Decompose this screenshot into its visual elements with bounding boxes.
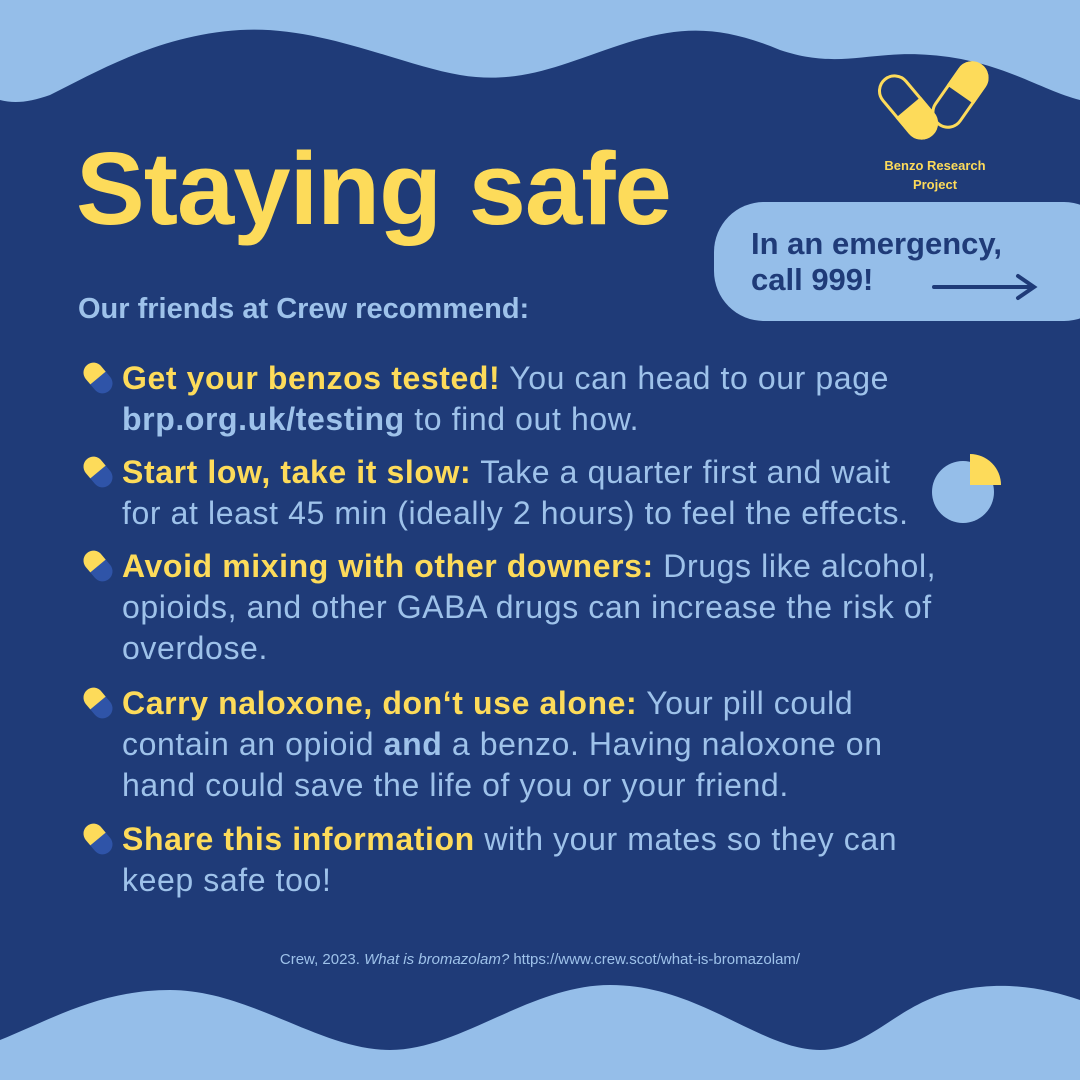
bullet 3: opioids, and other GABA drugs can increase the risk of xyxy=(122,589,932,625)
bullet 5: Share this information with your mates so they can xyxy=(122,821,897,857)
bullet 3 xyxy=(84,548,936,666)
bullet 3: overdose. xyxy=(122,630,268,666)
bullet 3: Avoid mixing with other downers: Drugs like alcohol, xyxy=(122,548,936,584)
bullet list xyxy=(84,360,936,898)
bullet 1: brp.org.uk/testing to find out how. xyxy=(122,401,639,437)
bullet 4 xyxy=(84,685,883,803)
bullet 2 xyxy=(84,454,909,531)
bullet 4: hand could save the life of you or your friend. xyxy=(122,767,789,803)
bullet 4: contain an opioid and a benzo. Having naloxone on xyxy=(122,726,883,762)
bullet 1: Get your benzos tested! You can head to our page xyxy=(122,360,889,396)
arrow xyxy=(932,274,1038,300)
bullet 2: for at least 45 min (ideally 2 hours) to feel the effects. xyxy=(122,495,909,531)
title: Staying safe xyxy=(76,131,671,246)
bullet 5: keep safe too! xyxy=(122,862,331,898)
bullet 4: Carry naloxone, don‘t use alone: Your pill could xyxy=(122,685,853,721)
citation: Crew, 2023. What is bromazolam? https://www.crew.scot/what-is-bromazolam/ xyxy=(280,951,800,968)
callout: emergency: In an emergency, xyxy=(751,226,1002,261)
callout: emergency xyxy=(714,202,1080,321)
bullet 5 xyxy=(84,821,897,898)
logo: Benzo Research Project: Benzo Research xyxy=(884,158,986,173)
subtitle: Our friends at Crew recommend: xyxy=(78,293,529,325)
logo: Benzo Research Project: Project xyxy=(913,177,957,192)
callout: emergency: call 999! xyxy=(751,262,873,297)
icon: pie chart xyxy=(932,454,1001,523)
bullet 1 xyxy=(84,360,889,437)
bullet 2: Start low, take it slow: Take a quarter first and wait xyxy=(122,454,891,490)
logo: Benzo Research Project xyxy=(878,61,989,192)
